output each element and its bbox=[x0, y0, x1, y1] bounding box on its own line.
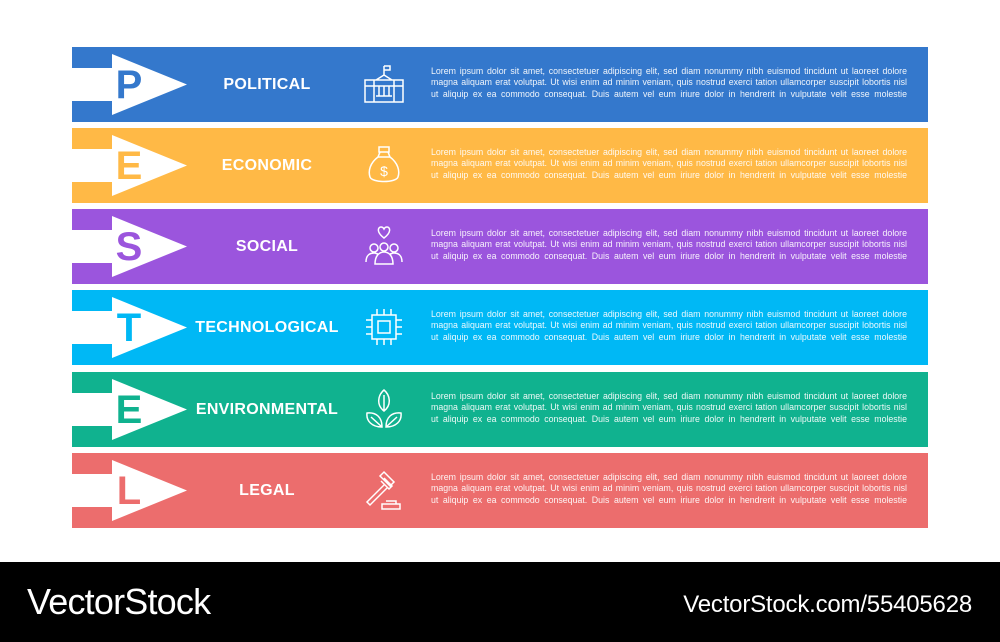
text: technological: ut aliquip ex ea commodo consequat. Duis autem vel eum iriure dolor in hendrerit in vulputate velit esse molestie bbox=[431, 332, 907, 342]
icon: government building bbox=[364, 65, 404, 103]
heading: political: POLITICAL bbox=[223, 76, 311, 93]
band: social bbox=[72, 209, 928, 284]
text: social: Lorem ipsum dolor sit amet, consectetuer adipiscing elit, sed diam nonummy nibh euismod tincidunt ut laoreet dolore bbox=[431, 228, 907, 238]
arrow: E bbox=[72, 379, 187, 440]
icon: people with heart bbox=[365, 226, 403, 265]
text: legal: magna aliquam erat volutpat. Ut wisi enim ad minim veniam, quis nostrud exerci tation ullamcorper suscipit lobortis nisl bbox=[431, 483, 907, 493]
text: political: Lorem ipsum dolor sit amet, consectetuer adipiscing elit, sed diam nonummy nibh euismod tincidunt ut laoreet dolore bbox=[431, 66, 907, 76]
heading: technological: TECHNOLOGICAL bbox=[195, 319, 339, 336]
icon: money bag bbox=[368, 146, 400, 182]
heading: legal: LEGAL bbox=[239, 482, 295, 499]
text: political: ut aliquip ex ea commodo consequat. Duis autem vel eum iriure dolor in hendrerit in vulputate velit esse molestie bbox=[431, 89, 907, 99]
text: environmental bbox=[431, 391, 907, 424]
letter S: S bbox=[116, 225, 142, 269]
text: social bbox=[431, 228, 907, 261]
text: legal: Lorem ipsum dolor sit amet, consectetuer adipiscing elit, sed diam nonummy nibh euismod tincidunt ut laoreet dolore bbox=[431, 472, 907, 482]
footer bar bbox=[0, 562, 1000, 642]
footer url: VectorStock.com/55405628 bbox=[683, 591, 972, 618]
text: legal: ut aliquip ex ea commodo consequat. Duis autem vel eum iriure dolor in hendrerit in vulputate velit esse molestie bbox=[431, 495, 907, 505]
text: economic: ut aliquip ex ea commodo consequat. Duis autem vel eum iriure dolor in hendrerit in vulputate velit esse molestie bbox=[431, 170, 907, 180]
text: environmental: Lorem ipsum dolor sit amet, consectetuer adipiscing elit, sed diam nonummy nibh euismod tincidunt ut laoreet dolore bbox=[431, 391, 907, 401]
band: legal bbox=[72, 453, 928, 528]
heading: economic: ECONOMIC bbox=[222, 157, 312, 174]
arrow: E bbox=[72, 135, 187, 196]
text: technological: Lorem ipsum dolor sit amet, consectetuer adipiscing elit, sed diam nonummy nibh euismod tincidunt ut laoreet dolore bbox=[431, 309, 907, 319]
text: political bbox=[431, 66, 907, 99]
arrow: S bbox=[72, 216, 187, 277]
text: technological bbox=[431, 309, 907, 342]
letter E: E bbox=[116, 388, 142, 432]
icon: chip bbox=[366, 309, 402, 345]
footer logo text: VectorStock bbox=[27, 581, 210, 622]
text: technological: magna aliquam erat volutpat. Ut wisi enim ad minim veniam, quis nostrud exerci tation ullamcorper suscipit lobortis nisl bbox=[431, 320, 907, 330]
icon: money bag: $ bbox=[380, 163, 388, 179]
text: legal bbox=[431, 472, 907, 505]
letter E: E bbox=[116, 144, 142, 188]
letter L: L bbox=[117, 469, 141, 513]
text: environmental: magna aliquam erat volutpat. Ut wisi enim ad minim veniam, quis nostrud exerci tation ullamcorper suscipit lobortis nisl bbox=[431, 402, 907, 412]
text: economic: Lorem ipsum dolor sit amet, consectetuer adipiscing elit, sed diam nonummy nibh euismod tincidunt ut laoreet dolore bbox=[431, 147, 907, 157]
text: social: ut aliquip ex ea commodo consequat. Duis autem vel eum iriure dolor in hendrerit in vulputate velit esse molestie bbox=[431, 251, 907, 261]
heading: environmental: ENVIRONMENTAL bbox=[196, 401, 338, 418]
icon: leaves bbox=[366, 389, 402, 428]
text: political: magna aliquam erat volutpat. Ut wisi enim ad minim veniam, quis nostrud exerci tation ullamcorper suscipit lobortis nisl bbox=[431, 77, 907, 87]
arrow: P bbox=[72, 54, 187, 115]
band: environmental bbox=[72, 372, 928, 447]
band: technological bbox=[72, 290, 928, 365]
text: social: magna aliquam erat volutpat. Ut wisi enim ad minim veniam, quis nostrud exerci tation ullamcorper suscipit lobortis nisl bbox=[431, 239, 907, 249]
band: economic bbox=[72, 128, 928, 203]
letter T: T bbox=[117, 306, 141, 350]
arrow: L bbox=[72, 460, 187, 521]
arrow: T bbox=[72, 297, 187, 358]
text: economic bbox=[431, 147, 907, 180]
text: environmental: ut aliquip ex ea commodo consequat. Duis autem vel eum iriure dolor in hendrerit in vulputate velit esse molestie bbox=[431, 414, 907, 424]
heading: social: SOCIAL bbox=[236, 238, 298, 255]
icon: gavel bbox=[366, 471, 401, 510]
band: political bbox=[72, 47, 928, 122]
text: economic: magna aliquam erat volutpat. Ut wisi enim ad minim veniam, quis nostrud exerci tation ullamcorper suscipit lobortis nisl bbox=[431, 158, 907, 168]
letter P: P bbox=[116, 63, 142, 107]
